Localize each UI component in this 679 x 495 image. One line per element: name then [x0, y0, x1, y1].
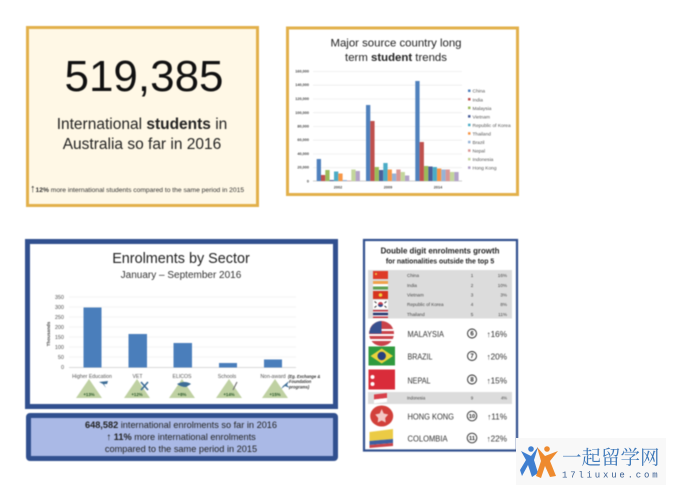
sector bar chart: Higher Education — [72, 374, 112, 380]
sector bar chart: Thousands — [46, 321, 51, 346]
row: Malaysia — [369, 321, 507, 346]
panel: total enrolments — [28, 416, 336, 458]
chart title: Major source country long — [330, 38, 462, 50]
non-award note: programs) — [288, 384, 310, 390]
sector icons — [99, 381, 290, 390]
flag: India — [373, 281, 388, 290]
sector bar chart: 350 — [55, 295, 64, 301]
grouped bar chart: 20,000 — [297, 166, 309, 170]
row: Malaysia: ↑16% — [487, 330, 507, 339]
flag: Republic of Korea — [373, 300, 388, 309]
comparison note: ↑12% more international students compared to the same period in 2015 — [30, 183, 244, 195]
grouped bar chart: 2009 — [384, 186, 392, 190]
headline number: 519,385 — [64, 52, 224, 101]
top five table: China — [407, 273, 419, 278]
row: Colombia: 11 — [469, 436, 475, 442]
row: Brazil — [368, 346, 507, 366]
chart legend: Thailand — [472, 132, 491, 138]
sector bar chart: 200 — [55, 325, 64, 331]
row: Colombia: ↑22% — [487, 434, 507, 444]
sector bar chart: 100 — [55, 345, 64, 351]
chart legend — [468, 89, 511, 172]
top five table: Vietnam — [407, 292, 424, 298]
flag: China — [373, 271, 388, 279]
top five table: 2 — [471, 283, 474, 288]
growth triangles: +14% — [223, 392, 235, 397]
row: Colombia: COLOMBIA — [408, 434, 448, 444]
row: Malaysia: MALAYSIA — [408, 329, 444, 339]
nationalities title: for nationalities outside the top 5 — [386, 258, 494, 266]
grouped bar chart — [295, 70, 462, 190]
grouped bar chart: 0 — [307, 180, 309, 184]
row: Indonesia: Indonesia — [407, 396, 426, 400]
top five table: 1 — [471, 273, 474, 278]
flag: Vietnam — [373, 291, 388, 299]
sector bar chart: 300 — [55, 305, 64, 311]
chart legend: Vietnam — [472, 114, 490, 120]
non-award note — [288, 374, 320, 390]
row: Brazil: ↑20% — [487, 352, 507, 362]
logo figures — [520, 446, 558, 478]
row: Indonesia: 9 — [471, 396, 474, 400]
top five table: 3 — [471, 292, 474, 298]
watermark logo — [516, 438, 666, 485]
chart title — [330, 38, 462, 64]
grouped bar chart: 160,000 — [295, 70, 309, 74]
chart title: term student trends — [345, 52, 447, 64]
chart legend: Nepal — [472, 149, 485, 155]
growth triangles: +8% — [178, 392, 187, 397]
sector title: Enrolments by Sector — [112, 251, 250, 267]
top five table: 10% — [498, 283, 507, 288]
bars: 2009 — [366, 105, 409, 181]
grouped bar chart: 2002 — [334, 186, 342, 190]
grouped bar chart: 2014 — [434, 186, 443, 190]
non-award note: Foundation — [289, 379, 312, 384]
sector bar chart: VET — [132, 374, 143, 380]
chart legend: Indonesia — [472, 157, 494, 163]
total enrolments text: compared to the same period in 2015 — [105, 444, 257, 454]
total enrolments text: 648,582 international enrolments so far in 2016 — [85, 420, 277, 430]
top five table: 8% — [500, 302, 507, 307]
headline caption: International students in — [57, 116, 227, 133]
logo url: 17liuxue.com — [562, 470, 660, 480]
sector bar chart: 0 — [61, 365, 64, 371]
top five table: 16% — [498, 273, 507, 278]
chart legend: Republic of Korea — [472, 123, 511, 129]
top five table: Republic of Korea — [407, 302, 444, 307]
row: Hong Kong: 10 — [469, 414, 475, 420]
growth triangles: +12% — [131, 392, 143, 397]
row: Brazil: BRAZIL — [408, 352, 433, 362]
total enrolments text: ↑ 11% more international enrolments — [106, 432, 256, 443]
flag: Thailand — [373, 310, 388, 318]
panel: source country trends — [288, 28, 518, 194]
row: Indonesia: 4% — [501, 396, 507, 400]
grouped bar chart: 80,000 — [297, 124, 309, 128]
non-award note: (Eg. Exchange & — [288, 374, 320, 379]
panel: enrolments by sector — [28, 242, 336, 406]
total enrolments text — [85, 420, 277, 454]
top five table: 3% — [500, 292, 507, 298]
top five table: 5 — [471, 312, 474, 317]
sector bar chart: ELICOS — [172, 374, 192, 380]
grouped bar chart: 100,000 — [295, 111, 309, 115]
top five table: 11% — [498, 312, 507, 317]
sector bar chart — [46, 295, 320, 390]
row: Colombia — [370, 429, 507, 448]
top five table — [368, 270, 512, 318]
row: Nepal: NEPAL — [408, 376, 431, 386]
row: Brazil: 7 — [470, 354, 474, 360]
chart legend: Malaysia — [472, 106, 492, 112]
sector bar chart: Schools — [218, 374, 237, 380]
panel: headline student count — [28, 28, 258, 206]
nationalities title: Double digit enrolments growth — [381, 246, 500, 256]
row: Nepal — [368, 370, 507, 390]
row: Hong Kong: HONG KONG — [408, 412, 454, 422]
top five table: India — [407, 283, 417, 288]
chart legend: Hong Kong — [472, 166, 497, 172]
headline caption: Australia so far in 2016 — [63, 136, 221, 153]
sector bar chart: Non-award — [260, 374, 286, 380]
panel: nationalities growth — [364, 240, 517, 450]
nationalities title — [381, 246, 500, 266]
grouped bar chart: 40,000 — [297, 152, 309, 156]
row: Malaysia: 6 — [470, 332, 474, 338]
row: Nepal: 8 — [470, 378, 474, 384]
chart legend: India — [472, 97, 483, 103]
bars: 2002 — [317, 159, 360, 181]
row: Hong Kong — [370, 406, 507, 426]
top five table: Thailand — [407, 312, 425, 317]
row: Hong Kong: ↑11% — [487, 412, 507, 422]
growth triangles: +13% — [83, 392, 95, 397]
growth triangles: +15% — [269, 392, 281, 397]
growth triangles — [76, 379, 288, 398]
grouped bar chart: 120,000 — [295, 97, 309, 101]
sector subtitle: January – September 2016 — [121, 270, 242, 281]
top five table: 4 — [471, 302, 474, 307]
sector bar chart: 250 — [55, 315, 64, 321]
grouped bar chart: 140,000 — [295, 83, 309, 87]
headline caption — [57, 116, 227, 153]
grouped bar chart: 60,000 — [297, 138, 309, 142]
sector bar chart: 150 — [55, 335, 64, 341]
chart legend: Brazil — [472, 140, 484, 146]
row: Indonesia — [368, 392, 512, 404]
row: Nepal: ↑15% — [487, 376, 507, 386]
bars: 2014 — [415, 81, 459, 181]
sector bar chart: 50 — [58, 355, 64, 361]
logo text: 一起留学网 — [562, 442, 660, 470]
chart legend: China — [472, 89, 485, 95]
